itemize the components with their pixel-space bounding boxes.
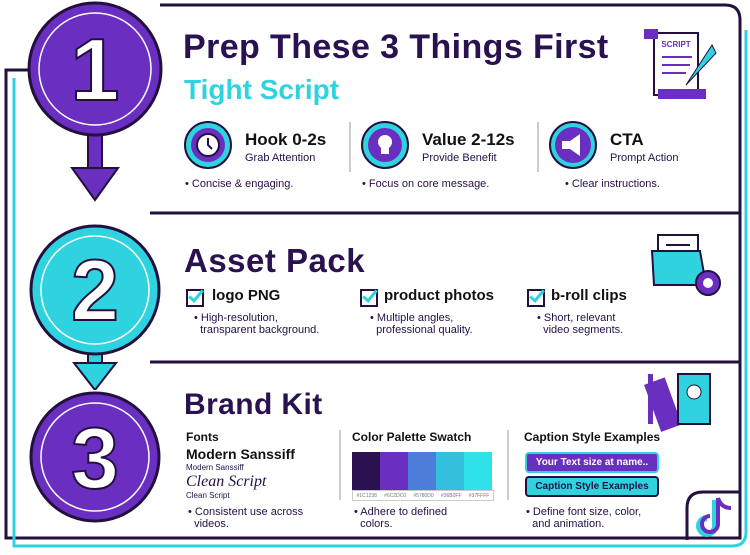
item: cta — [549, 121, 678, 190]
fonts block: Modern Sanssiff — [186, 463, 244, 472]
icon: script — [644, 29, 717, 99]
fonts block: Clean Script — [186, 473, 266, 490]
item: value: Value 2-12s — [422, 130, 515, 149]
checklist: product — [360, 287, 494, 336]
heading: brand kit: Brand Kit — [184, 388, 323, 421]
text: • Focus on core message. — [362, 178, 489, 190]
subtitle: Tight Script — [184, 74, 339, 105]
caption block: Caption Style Examples — [535, 481, 649, 492]
item: hook: Hook 0-2s — [245, 130, 326, 149]
circle 3: 3 — [71, 411, 119, 507]
fonts block — [186, 430, 303, 530]
item: hook — [184, 121, 326, 190]
circle 3 — [30, 392, 160, 522]
checklist: logo: transparent background. — [200, 324, 319, 336]
title: Prep These 3 Things First — [183, 28, 609, 66]
heading: asset pack: Asset Pack — [184, 242, 365, 279]
caption block: • Define font size, color, — [526, 506, 641, 518]
palette block: #37FFFF — [469, 492, 489, 498]
checklist: broll: video segments. — [543, 324, 623, 336]
fonts block: Fonts — [186, 430, 219, 444]
caption block — [524, 430, 660, 530]
circle 1 with arrow: 1 — [71, 20, 119, 119]
caption block: Your Text size at name.. — [536, 457, 648, 468]
icon: tiktok corner — [686, 490, 738, 540]
checklist: logo: logo PNG — [212, 287, 280, 304]
text: • Clear instructions. — [565, 178, 660, 190]
palette block: • Adhere to defined — [354, 506, 447, 518]
item: value: Provide Benefit — [422, 152, 497, 164]
palette block: #6C2DC0 — [384, 492, 406, 498]
checklist: product: professional quality. — [376, 324, 473, 336]
palette block: #5780D0 — [413, 492, 434, 498]
palette block: Color Palette Swatch — [352, 430, 471, 444]
fonts block: Clean Script — [186, 491, 230, 500]
checklist: broll: • Short, relevant — [537, 312, 615, 324]
palette block: #36B0FF — [441, 492, 462, 498]
fonts block: Modern Sanssiff — [186, 446, 295, 462]
checklist: logo: • High-resolution, — [194, 312, 278, 324]
palette block — [352, 430, 494, 530]
circle 1 with arrow — [28, 2, 162, 202]
palette block: #1C1238 — [357, 492, 377, 498]
text: • Concise & engaging. — [185, 178, 293, 190]
icon: folder — [650, 234, 721, 296]
checklist: product: • Multiple angles, — [370, 312, 453, 324]
item: hook: Grab Attention — [245, 152, 315, 164]
circle 2 with arrow: 2 — [71, 243, 119, 339]
item: value — [361, 121, 515, 190]
fonts block: • Consistent use across — [188, 506, 303, 518]
item: cta: Prompt Action — [610, 152, 678, 164]
text: videos. — [194, 518, 229, 530]
icon: script: SCRIPT — [661, 40, 691, 49]
checklist: broll — [527, 287, 627, 336]
icon: brand book — [644, 373, 711, 432]
checklist: product: product photos — [384, 287, 494, 304]
item: cta: CTA — [610, 130, 644, 149]
caption block: Caption Style Examples — [524, 430, 660, 444]
circle 2 with arrow — [30, 224, 160, 390]
checklist: broll: b-roll clips — [551, 287, 627, 304]
checklist: logo — [186, 287, 319, 336]
text: colors. — [360, 518, 393, 530]
text: and animation. — [532, 518, 604, 530]
